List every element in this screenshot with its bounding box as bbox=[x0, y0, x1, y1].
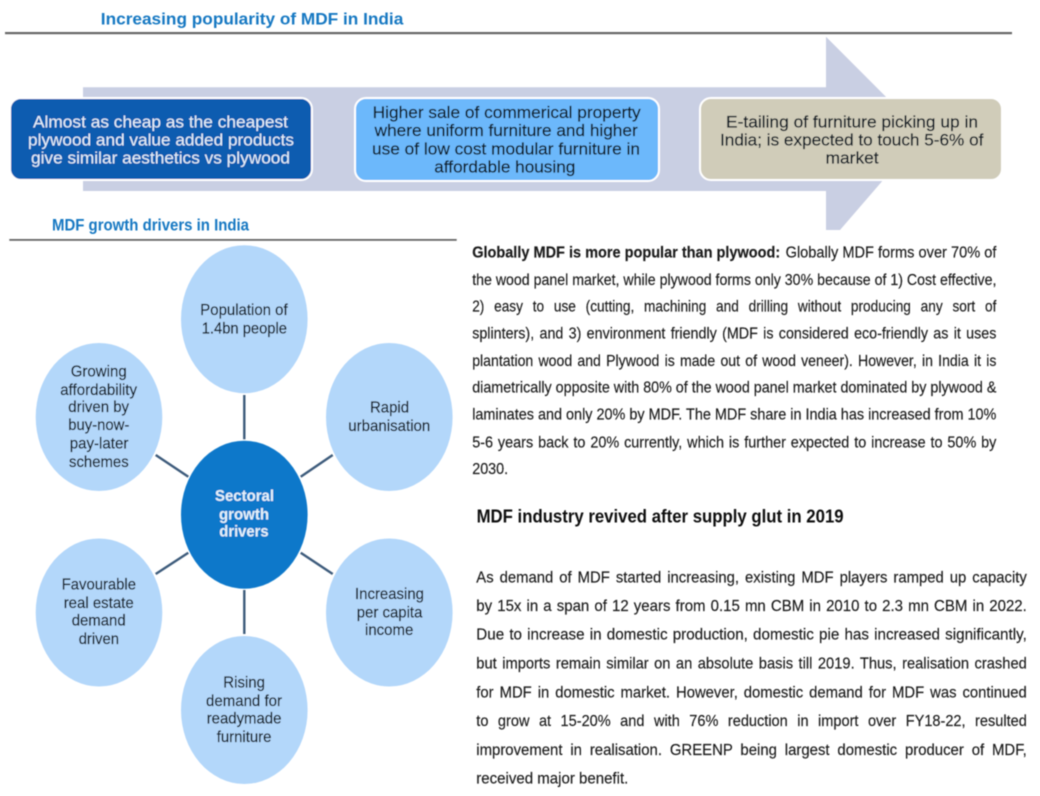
panel: cost box: Almost as cheap as the cheapest bbox=[33, 112, 288, 132]
node: real estate demand: Favourable bbox=[62, 576, 136, 594]
node: population: Population of bbox=[200, 302, 288, 319]
text block: MDF industry revival bbox=[476, 570, 1027, 788]
node: readymade furniture: demand for bbox=[206, 693, 283, 710]
node: affordability: buy-now- bbox=[68, 417, 129, 434]
text block: globally MDF more popular than plywood bbox=[472, 244, 997, 478]
hub: sectoral growth drivers: Sectoral bbox=[215, 488, 274, 505]
panel: cost box bbox=[10, 98, 312, 180]
heading: MDF industry revived after supply glut in 2019: MDF industry revived after supply glut in 2019 bbox=[477, 506, 844, 526]
text block: MDF industry revival: received major benefit. bbox=[476, 770, 628, 788]
node: affordability: driven by bbox=[68, 399, 129, 416]
node: real estate demand: demand bbox=[72, 612, 126, 630]
text block: globally MDF more popular than plywood: Globally MDF forms over 70% of bbox=[786, 244, 997, 262]
node: population: 1.4bn people bbox=[202, 320, 287, 337]
node: per capita income: income bbox=[365, 622, 413, 639]
hub: sectoral growth drivers bbox=[181, 441, 308, 589]
panel: cost box: give similar aesthetics vs plywood bbox=[31, 148, 290, 168]
panel: e-tailing box bbox=[700, 98, 1002, 180]
node: urbanisation bbox=[326, 343, 453, 491]
connectors bbox=[156, 395, 333, 634]
arrow: progression background bbox=[83, 37, 923, 230]
title: Increasing popularity of MDF in India: Increasing popularity of MDF in India bbox=[101, 10, 404, 28]
text block: globally MDF more popular than plywood: Globally MDF is more popular than plywood: bbox=[472, 244, 780, 262]
node: affordability: pay-later bbox=[70, 436, 129, 452]
node: affordability: affordability bbox=[60, 382, 137, 399]
node: per capita income: Increasing bbox=[355, 586, 424, 603]
node: per capita income bbox=[326, 538, 453, 686]
hub: sectoral growth drivers: drivers bbox=[219, 524, 269, 540]
text block: globally MDF more popular than plywood: 2030. bbox=[472, 461, 508, 478]
panel: commercial property box bbox=[355, 98, 659, 181]
panel: commercial property box: affordable housing bbox=[434, 158, 575, 176]
panel: cost box: plywood and value added products bbox=[28, 130, 294, 150]
panel: commercial property box: use of low cost modular furniture in bbox=[372, 140, 640, 158]
node: readymade furniture: readymade bbox=[207, 710, 281, 728]
node: affordability: Growing bbox=[71, 364, 127, 380]
node: urbanisation: urbanisation bbox=[348, 418, 430, 435]
node: real estate demand: driven bbox=[79, 631, 119, 648]
node: readymade furniture bbox=[181, 636, 308, 784]
panel: e-tailing box: E-tailing of furniture picking up in bbox=[726, 112, 978, 132]
node: readymade furniture: Rising bbox=[223, 674, 265, 692]
node: affordability: schemes bbox=[69, 454, 129, 471]
node: readymade furniture: furniture bbox=[217, 729, 271, 746]
node: per capita income: per capita bbox=[357, 604, 422, 622]
text block: globally MDF more popular than plywood: 5-6 years back to 20% currently, which is further expected to increase to 50% by bbox=[472, 434, 996, 452]
panel: e-tailing box: market bbox=[826, 148, 879, 168]
chart: sectoral growth drivers hub diagram bbox=[36, 245, 453, 784]
node: affordability bbox=[36, 343, 162, 491]
heading: MDF growth drivers in India: MDF growth drivers in India bbox=[52, 216, 250, 234]
hub: sectoral growth drivers: growth bbox=[219, 506, 269, 524]
text block: globally MDF more popular than plywood: laminates and only 20% by MDF. The MDF share in India has increased from 10% bbox=[472, 406, 996, 424]
panel: e-tailing box: India; is expected to touch 5-6% of bbox=[720, 130, 984, 150]
panel: commercial property box: where uniform furniture and higher bbox=[374, 121, 638, 140]
node: real estate demand: real estate bbox=[64, 595, 134, 612]
node: urbanisation: Rapid bbox=[370, 400, 409, 416]
panel: commercial property box: Higher sale of commerical property bbox=[373, 103, 641, 122]
node: real estate demand bbox=[36, 538, 162, 686]
node: population bbox=[181, 245, 308, 393]
text block: MDF industry revival: Due to increase in domestic production, domestic pie has increased significantly, bbox=[476, 626, 1027, 644]
